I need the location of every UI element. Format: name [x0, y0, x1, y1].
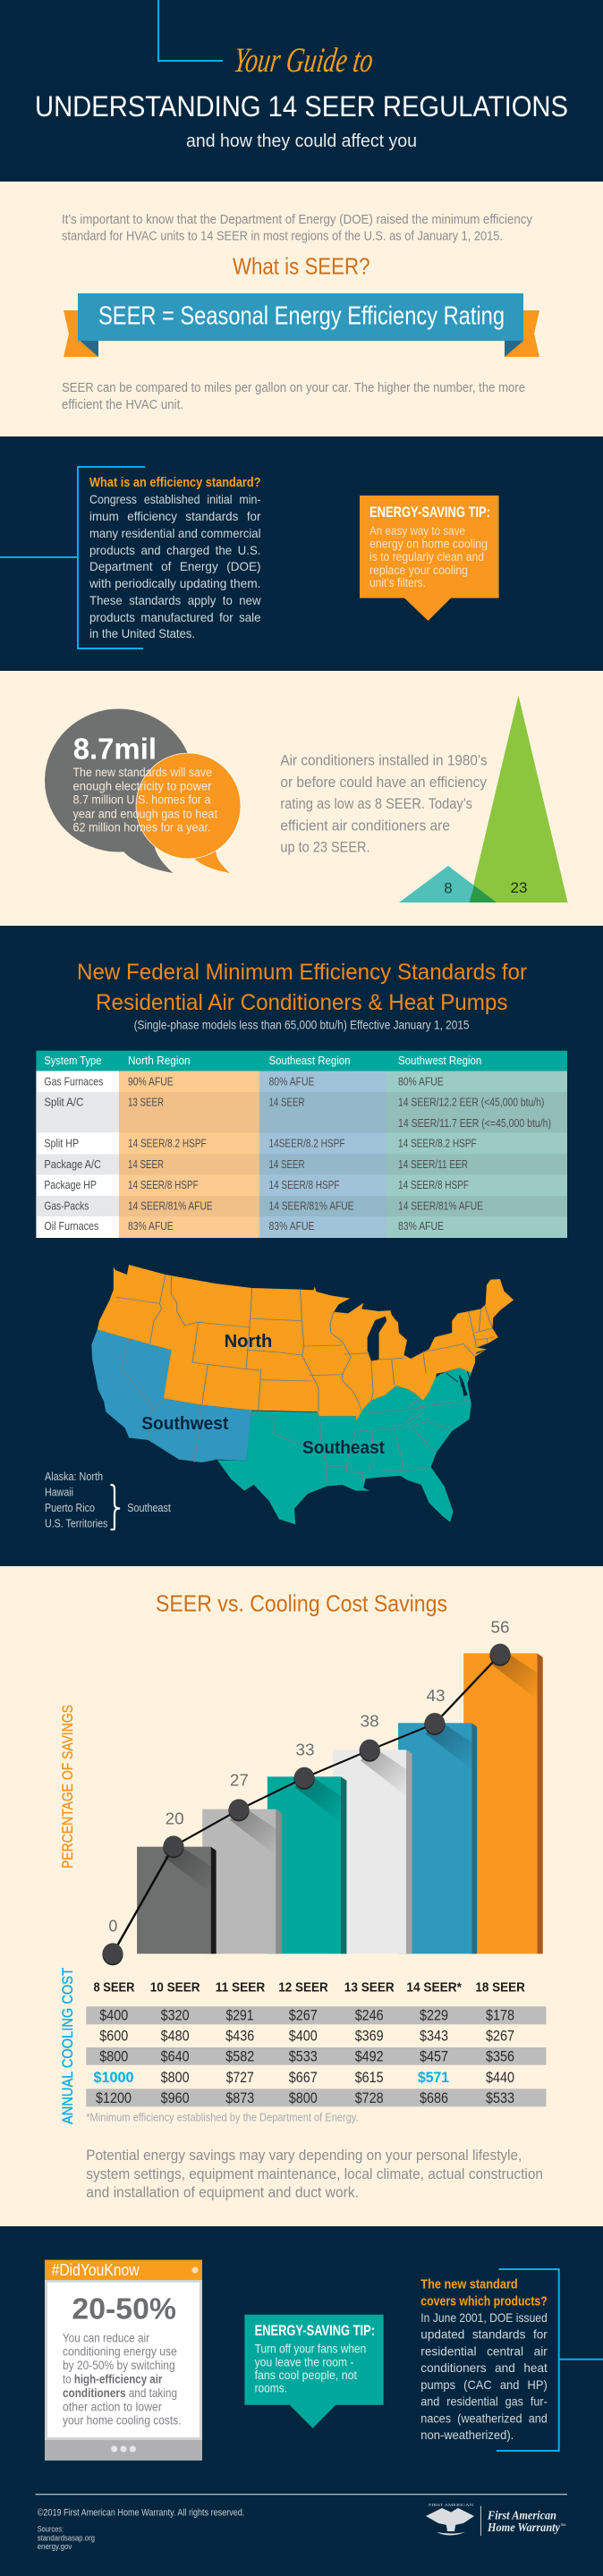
panel: what is an efficiency standard: These standards apply to new [89, 593, 261, 607]
text: air conditioner history: or before could have an efficiency [280, 775, 488, 791]
axis label: annual cooling cost: ANNUAL COOLING COST [59, 1968, 76, 2124]
table: annual cooling cost: $800 [161, 2069, 190, 2086]
text: air conditioner history: rating as low as 8 SEER. Today’s [280, 796, 472, 812]
callout: energy-saving tip, teal: rooms. [255, 2382, 287, 2395]
subtitle: and how they could affect you [186, 131, 417, 151]
speech bubbles: 8.7 million: 62 million homes for a year. [73, 821, 211, 835]
table: efficiency standards: 14 SEER/8.2 HSPF [128, 1137, 207, 1150]
panel: what is an efficiency standard [0, 467, 261, 648]
table: efficiency standards: Southwest Region [398, 1054, 481, 1067]
table: efficiency standards: 14 SEER [268, 1096, 304, 1109]
table: annual cooling cost: 18 SEER [475, 1980, 525, 1996]
table: annual cooling cost: $436 [225, 2028, 254, 2045]
table: efficiency standards: 90% AFUE [128, 1074, 174, 1088]
panel: which products are covered: covers which products? [420, 2294, 548, 2309]
panel: did you know card: conditioning energy use [63, 2344, 177, 2359]
panel: what is an efficiency standard: imum efficiency standards for [89, 509, 261, 523]
panel: what is an efficiency standard: with periodically updating them. [89, 576, 260, 590]
legend: other territories: Southeast [127, 1502, 171, 1514]
speech bubbles: 8.7 million: enough electricity to power [73, 780, 212, 793]
panel: what is an efficiency standard: products and charged the U.S. [89, 543, 261, 557]
heading: federal standards: Residential Air Conditioners & Heat Pumps [96, 990, 508, 1015]
table: annual cooling cost: 14 SEER* [406, 1980, 462, 1996]
heading: What is SEER?: What is SEER? [233, 253, 370, 280]
table: annual cooling cost: $800 [289, 2089, 318, 2106]
table: annual cooling cost: $571 [418, 2069, 449, 2086]
ribbon banner [64, 293, 539, 357]
logo: First American Home Warranty: Home Warranty [487, 2521, 561, 2534]
table: annual cooling cost: $600 [99, 2028, 128, 2045]
callout: energy-saving tip, orange: An easy way to save [369, 524, 465, 538]
panel: did you know card: conditioners and taking [63, 2385, 177, 2400]
table: annual cooling cost: $369 [355, 2028, 384, 2045]
table: efficiency standards: 14 SEER/11 EER [398, 1157, 468, 1171]
header [35, 0, 568, 151]
SEER explanation [62, 381, 525, 412]
table: annual cooling cost: $492 [355, 2048, 384, 2065]
intro paragraph: It’s important to know that the Department of Energy (DOE) raised the minimum efficiency [62, 213, 533, 227]
panel: which products are covered: naces (weatherized and [420, 2411, 548, 2425]
intro paragraph [62, 213, 533, 244]
text: air conditioner history: Air conditioners installed in 1980’s [280, 753, 488, 769]
region: north [98, 1265, 514, 1420]
legend: other territories: Puerto Rico [45, 1502, 95, 1514]
table: efficiency standards: Split A/C [44, 1096, 83, 1109]
panel: did you know card [45, 2260, 202, 2461]
table: efficiency standards: 14 SEER/81% AFUE [268, 1199, 354, 1212]
table: annual cooling cost: 11 SEER [216, 1980, 265, 1996]
callout: energy-saving tip, teal: you leave the room - [255, 2355, 354, 2368]
text: savings disclaimer: system settings, equipment maintenance, local climate, actual construction [86, 2166, 543, 2182]
value labels: 33 [295, 1741, 315, 1759]
panel: which products are covered: conditioners and heat [420, 2360, 548, 2375]
callout: energy-saving tip, orange: ENERGY-SAVING TIP: [369, 504, 490, 521]
panel: what is an efficiency standard: products manufactured for sale [89, 610, 261, 624]
legend: other territories: U.S. Territories [45, 1518, 107, 1530]
table: annual cooling cost: $640 [161, 2048, 190, 2065]
text: air conditioner history [280, 753, 488, 855]
callout: energy-saving tip, orange: unit’s filters. [369, 576, 426, 589]
table: efficiency standards: 14 SEER [268, 1157, 304, 1171]
table: efficiency standards: 14 SEER/8 HSPF [128, 1178, 199, 1191]
speech bubbles: 8.7 million: year and enough gas to heat [73, 808, 217, 821]
panel: which products are covered: In June 2001, DOE issued [420, 2310, 548, 2325]
table: efficiency standards: North Region [128, 1054, 191, 1067]
table: annual cooling cost: $960 [161, 2089, 190, 2106]
legend: other territories [45, 1470, 171, 1530]
panel: what is an efficiency standard: in the United States. [89, 626, 195, 640]
map label: north: North [225, 1332, 272, 1352]
panel: which products are covered [420, 2269, 603, 2451]
heading: SEER vs cooling cost savings: SEER vs. Cooling Cost Savings [156, 1590, 447, 1617]
table: efficiency standards: 14 SEER/8 HSPF [268, 1178, 340, 1191]
table: efficiency standards: 14SEER/8.2 HSPF [268, 1137, 345, 1150]
table: efficiency standards: Southeast Region [268, 1054, 351, 1067]
panel: did you know card: #DidYouKnow [52, 2261, 140, 2279]
speech bubbles: 8.7 million: The new standards will save [73, 766, 212, 779]
table: efficiency standards: 14 SEER/8.2 HSPF [398, 1137, 477, 1150]
bar: 14 SEER [398, 1723, 477, 1953]
footer: copyright and sources: Sources: [38, 2525, 64, 2535]
value labels [108, 1618, 509, 1935]
table: efficiency standards: 83% AFUE [128, 1219, 174, 1233]
value labels: 0 [108, 1916, 117, 1935]
table: annual cooling cost: $480 [161, 2028, 190, 2045]
value labels: 43 [426, 1686, 446, 1705]
footer: copyright and sources: ©2019 First American Home Warranty. All rights reserved. [38, 2508, 244, 2519]
text: air conditioner history: efficient air conditioners are [280, 818, 450, 835]
table: efficiency standards: System Type [44, 1054, 101, 1067]
table: annual cooling cost: $686 [420, 2089, 448, 2106]
map label: southeast: Southeast [302, 1438, 385, 1458]
panel: what is an efficiency standard: Department of Energy (DOE) [89, 559, 261, 573]
bar: 18 SEER [463, 1653, 543, 1953]
panel: did you know card: your home cooling costs. [63, 2413, 181, 2428]
table: efficiency standards: 83% AFUE [268, 1219, 315, 1233]
table: annual cooling cost: 12 SEER [278, 1980, 328, 1996]
title: UNDERSTANDING 14 SEER REGULATIONS [35, 90, 568, 123]
table: annual cooling cost: $320 [161, 2006, 190, 2023]
region: southwest [91, 1330, 252, 1462]
panel: did you know card: other action to lower [63, 2399, 162, 2413]
footer: copyright and sources: energy.gov [38, 2542, 72, 2552]
table: annual cooling cost: $440 [486, 2069, 514, 2086]
table: efficiency standards: 14 SEER/81% AFUE [128, 1199, 213, 1212]
table: annual cooling cost: $615 [355, 2069, 384, 2086]
table: annual cooling cost: $246 [355, 2006, 384, 2023]
footer: copyright and sources: standardsasap.org [38, 2533, 95, 2543]
map: US regions [91, 1265, 514, 1524]
footnote: *Minimum efficiency established by the Department of Energy. [86, 2111, 359, 2124]
table: annual cooling cost: $400 [289, 2028, 318, 2045]
value labels: 27 [230, 1771, 249, 1790]
callout: energy-saving tip, orange: is to regularly clean and [369, 550, 484, 564]
table: efficiency standards: 14 SEER/8 HSPF [398, 1178, 469, 1191]
table: annual cooling cost: $800 [99, 2048, 128, 2065]
table: annual cooling cost: $727 [226, 2069, 254, 2086]
logo: First American Home Warranty: First American [487, 2509, 556, 2522]
speech bubbles: 8.7 million: 8.7 million U.S. homes for a [73, 793, 211, 807]
text: air conditioner history: up to 23 SEER. [280, 839, 370, 855]
table: annual cooling cost: $267 [289, 2006, 318, 2023]
heading: federal standards: (Single-phase models less than 65,000 btu/h) Effective January 1, 2015 [134, 1018, 470, 1032]
table: efficiency standards [36, 1051, 567, 1238]
table: annual cooling cost: $356 [486, 2048, 514, 2065]
script heading: Your Guide to: Your Guide to [232, 41, 376, 80]
logo: First American Home Warranty: SM [560, 2522, 565, 2527]
trend line [113, 1655, 500, 1953]
icon: eagle [426, 2503, 474, 2535]
table: annual cooling cost: $533 [289, 2048, 318, 2065]
panel: which products are covered: non-weatherized). [420, 2428, 514, 2442]
panel: which products are covered: and residential gas fur- [420, 2394, 548, 2409]
panel: did you know card: You can reduce air [63, 2330, 149, 2344]
table: efficiency standards: 14 SEER/81% AFUE [398, 1199, 483, 1212]
table: annual cooling cost: $728 [355, 2089, 384, 2106]
triangle chart: 8 vs 23 SEER [399, 696, 568, 902]
table: efficiency standards: Split HP [44, 1137, 79, 1150]
heading: federal standards: New Federal Minimum Efficiency Standards for [77, 960, 527, 985]
data point shadows [102, 1644, 511, 1965]
table: annual cooling cost: $1200 [96, 2089, 132, 2106]
accent line [158, 0, 223, 61]
callout: energy-saving tip, teal [244, 2315, 384, 2428]
table: efficiency standards: Gas Furnaces [44, 1074, 104, 1088]
bar: 10 SEER [137, 1847, 217, 1953]
triangle chart: 8 vs 23 SEER: 23 [511, 879, 527, 896]
panel: did you know card: to high-efficiency air [63, 2371, 163, 2385]
table: efficiency standards: 83% AFUE [398, 1219, 444, 1233]
table: efficiency standards: 14 SEER/11.7 EER (<=45,000 btu/h) [398, 1116, 551, 1130]
table: annual cooling cost: $667 [289, 2069, 318, 2086]
callout: energy-saving tip, orange [360, 496, 499, 621]
map label: southwest: Southwest [141, 1414, 229, 1434]
value labels: 56 [490, 1618, 510, 1637]
intro paragraph: standard for HVAC units to 14 SEER in most regions of the U.S. as of January 1, 2015. [62, 230, 503, 244]
bar: 11 SEER [202, 1809, 282, 1953]
panel: which products are covered: updated standards for [420, 2327, 548, 2342]
logo: First American Home Warranty [426, 2503, 565, 2536]
bar: 13 SEER [333, 1750, 412, 1953]
callout: energy-saving tip, orange: energy on home cooling [369, 537, 488, 551]
table: annual cooling cost: $457 [420, 2048, 448, 2065]
bar: 12 SEER [268, 1776, 346, 1953]
callout: energy-saving tip, teal: fans cool people, not [255, 2368, 357, 2382]
panel: did you know card: 20-50% [72, 2292, 176, 2326]
table: annual cooling cost: 10 SEER [150, 1980, 200, 1996]
panel: what is an efficiency standard: What is an efficiency standard? [89, 476, 261, 490]
table: efficiency standards: 14 SEER/12.2 EER (<45,000 btu/h) [398, 1096, 544, 1109]
panel: what is an efficiency standard: many residential and commercial [89, 526, 261, 540]
text: savings disclaimer [86, 2148, 543, 2201]
table: annual cooling cost: $291 [225, 2006, 254, 2023]
callout: energy-saving tip, orange: replace your cooling [369, 564, 468, 577]
table: annual cooling cost: $582 [225, 2048, 254, 2065]
triangle chart: 8 vs 23 SEER: 8 [444, 880, 453, 897]
table: efficiency standards: 13 SEER [128, 1096, 164, 1109]
table: annual cooling cost: $873 [225, 2089, 254, 2106]
legend: other territories: Hawaii [45, 1487, 73, 1499]
panel: did you know card: by 20-50% by switching [63, 2358, 175, 2372]
callout: energy-saving tip, teal: Turn off your fans when [255, 2343, 366, 2356]
legend: other territories: Alaska: North [45, 1470, 103, 1483]
speech bubbles: 8.7 million: 8.7mil [73, 733, 157, 766]
table: efficiency standards: 14 SEER [128, 1157, 164, 1171]
table: annual cooling cost: $267 [486, 2028, 514, 2045]
table: annual cooling cost: $1000 [93, 2069, 134, 2086]
table: efficiency standards: Package HP [44, 1178, 97, 1191]
text: savings disclaimer: and installation of equipment and duct work. [86, 2185, 359, 2201]
table: annual cooling cost: $400 [99, 2006, 128, 2023]
table: annual cooling cost [86, 1980, 547, 2106]
panel: what is an efficiency standard: Congress established initial min- [89, 492, 261, 506]
table: annual cooling cost: 8 SEER [93, 1980, 135, 1996]
data points [103, 1644, 510, 1964]
table: efficiency standards: Gas-Packs [44, 1199, 89, 1212]
table: annual cooling cost: $229 [420, 2006, 448, 2023]
table: annual cooling cost: $178 [486, 2006, 514, 2023]
table: efficiency standards: Oil Furnaces [44, 1219, 99, 1233]
panel: which products are covered: residential central air [420, 2343, 548, 2358]
table: efficiency standards: 80% AFUE [398, 1074, 444, 1088]
heading: federal standards [77, 960, 527, 1032]
lakes and bays [368, 1317, 386, 1361]
panel: which products are covered: The new standard [420, 2277, 518, 2292]
text: savings disclaimer: Potential energy savings may vary depending on your personal lifestyle, [86, 2148, 522, 2164]
SEER explanation: efficient the HVAC unit. [62, 398, 183, 412]
value labels: 38 [361, 1711, 379, 1730]
icon: eagle: FIRST AMERICAN [429, 2503, 474, 2507]
footer: copyright and sources [38, 2508, 244, 2552]
callout: energy-saving tip, teal: ENERGY-SAVING TIP: [255, 2322, 375, 2339]
table: efficiency standards: Package A/C [44, 1157, 101, 1171]
table: annual cooling cost: $533 [486, 2089, 514, 2106]
bar chart: savings by SEER [102, 1618, 543, 1965]
panel: which products are covered: pumps (CAC and HP) [420, 2377, 548, 2392]
region: southeast [217, 1368, 471, 1524]
value labels: 20 [166, 1809, 184, 1827]
table: annual cooling cost: $343 [420, 2028, 448, 2045]
SEER explanation: SEER can be compared to miles per gallon on your car. The higher the number, the more [62, 381, 525, 395]
ribbon banner: SEER = Seasonal Energy Efficiency Rating [98, 302, 505, 331]
table: efficiency standards: 80% AFUE [268, 1074, 315, 1088]
axis label: percentage of savings: PERCENTAGE OF SAVINGS [59, 1705, 76, 1868]
speech bubbles: 8.7 million [45, 708, 241, 873]
table: annual cooling cost: 13 SEER [344, 1980, 395, 1996]
